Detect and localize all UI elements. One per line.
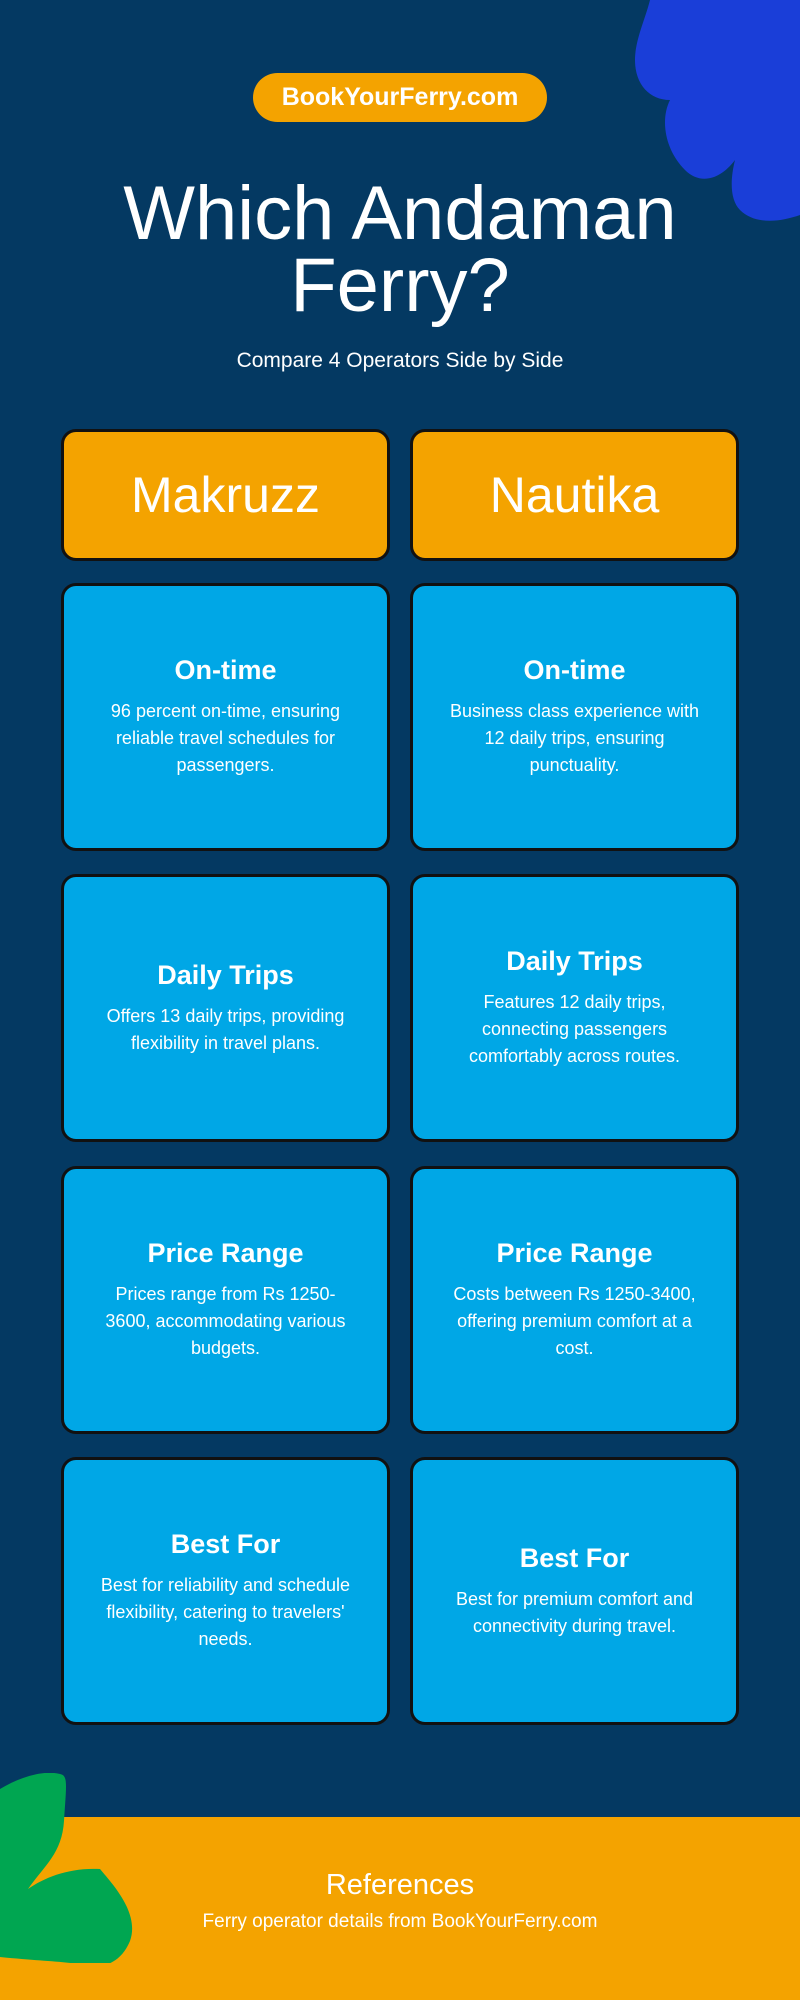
decorative blob: green leaf: [0, 1773, 132, 1963]
card: Makruzz on-time: [61, 583, 390, 851]
header: Nautika: [410, 429, 739, 561]
title: Which Andaman: [123, 171, 677, 256]
card: Nautika daily trips: Daily Trips: [506, 946, 643, 976]
card: Nautika best for: Best for premium comfort and connectivity during travel.: [456, 1588, 693, 1636]
card: Makruzz on-time: On-time: [174, 655, 276, 685]
header: Makruzz: Makruzz: [131, 467, 320, 523]
card: Nautika on-time: Business class experience with 12 daily trips, ensuring punctuality.: [450, 701, 699, 775]
card: Makruzz on-time: 96 percent on-time, ensuring reliable travel schedules for passengers.: [111, 701, 340, 775]
badge: BookYourFerry.com: [253, 73, 547, 122]
badge: BookYourFerry.com: BookYourFerry.com: [282, 83, 518, 111]
card: Nautika on-time: [410, 583, 739, 851]
card: Nautika best for: Best For: [520, 1542, 629, 1572]
decorative blob: blue flower: [635, 0, 800, 221]
card: Makruzz daily trips: Daily Trips: [157, 960, 294, 990]
footer: references: References: [326, 1869, 474, 1901]
footer: references: [0, 1817, 800, 2000]
card: Makruzz best for: Best For: [171, 1529, 280, 1559]
card: Nautika on-time: On-time: [523, 655, 626, 685]
card: Nautika price range: Costs between Rs 1250-3400, offering premium comfort at a cost.: [453, 1284, 696, 1358]
card: Makruzz best for: [61, 1457, 390, 1725]
card: Makruzz price range: Price Range: [147, 1238, 304, 1268]
card: Nautika daily trips: [410, 874, 739, 1142]
header: Makruzz: [61, 429, 390, 561]
card: Makruzz price range: [61, 1166, 390, 1434]
title: [123, 171, 677, 328]
card: Makruzz price range: Prices range from Rs 1250-3600, accommodating various budgets.: [105, 1284, 346, 1358]
card: Nautika price range: [410, 1166, 739, 1434]
footer: references: Ferry operator details from BookYourFerry.com: [203, 1911, 597, 1932]
header: Nautika: Nautika: [490, 467, 659, 523]
card: Nautika daily trips: Features 12 daily trips, connecting passengers comfortably across routes.: [469, 992, 680, 1066]
card: Makruzz daily trips: Offers 13 daily trips, providing flexibility in travel plans.: [107, 1006, 344, 1052]
card: Nautika price range: Price Range: [496, 1238, 653, 1268]
card: Makruzz daily trips: [61, 874, 390, 1142]
card: Makruzz best for: Best for reliability and schedule flexibility, catering to travelers' needs.: [101, 1575, 350, 1649]
card: Nautika best for: [410, 1457, 739, 1725]
subtitle: Compare 4 Operators Side by Side: [237, 349, 563, 372]
title: Ferry?: [290, 243, 510, 328]
